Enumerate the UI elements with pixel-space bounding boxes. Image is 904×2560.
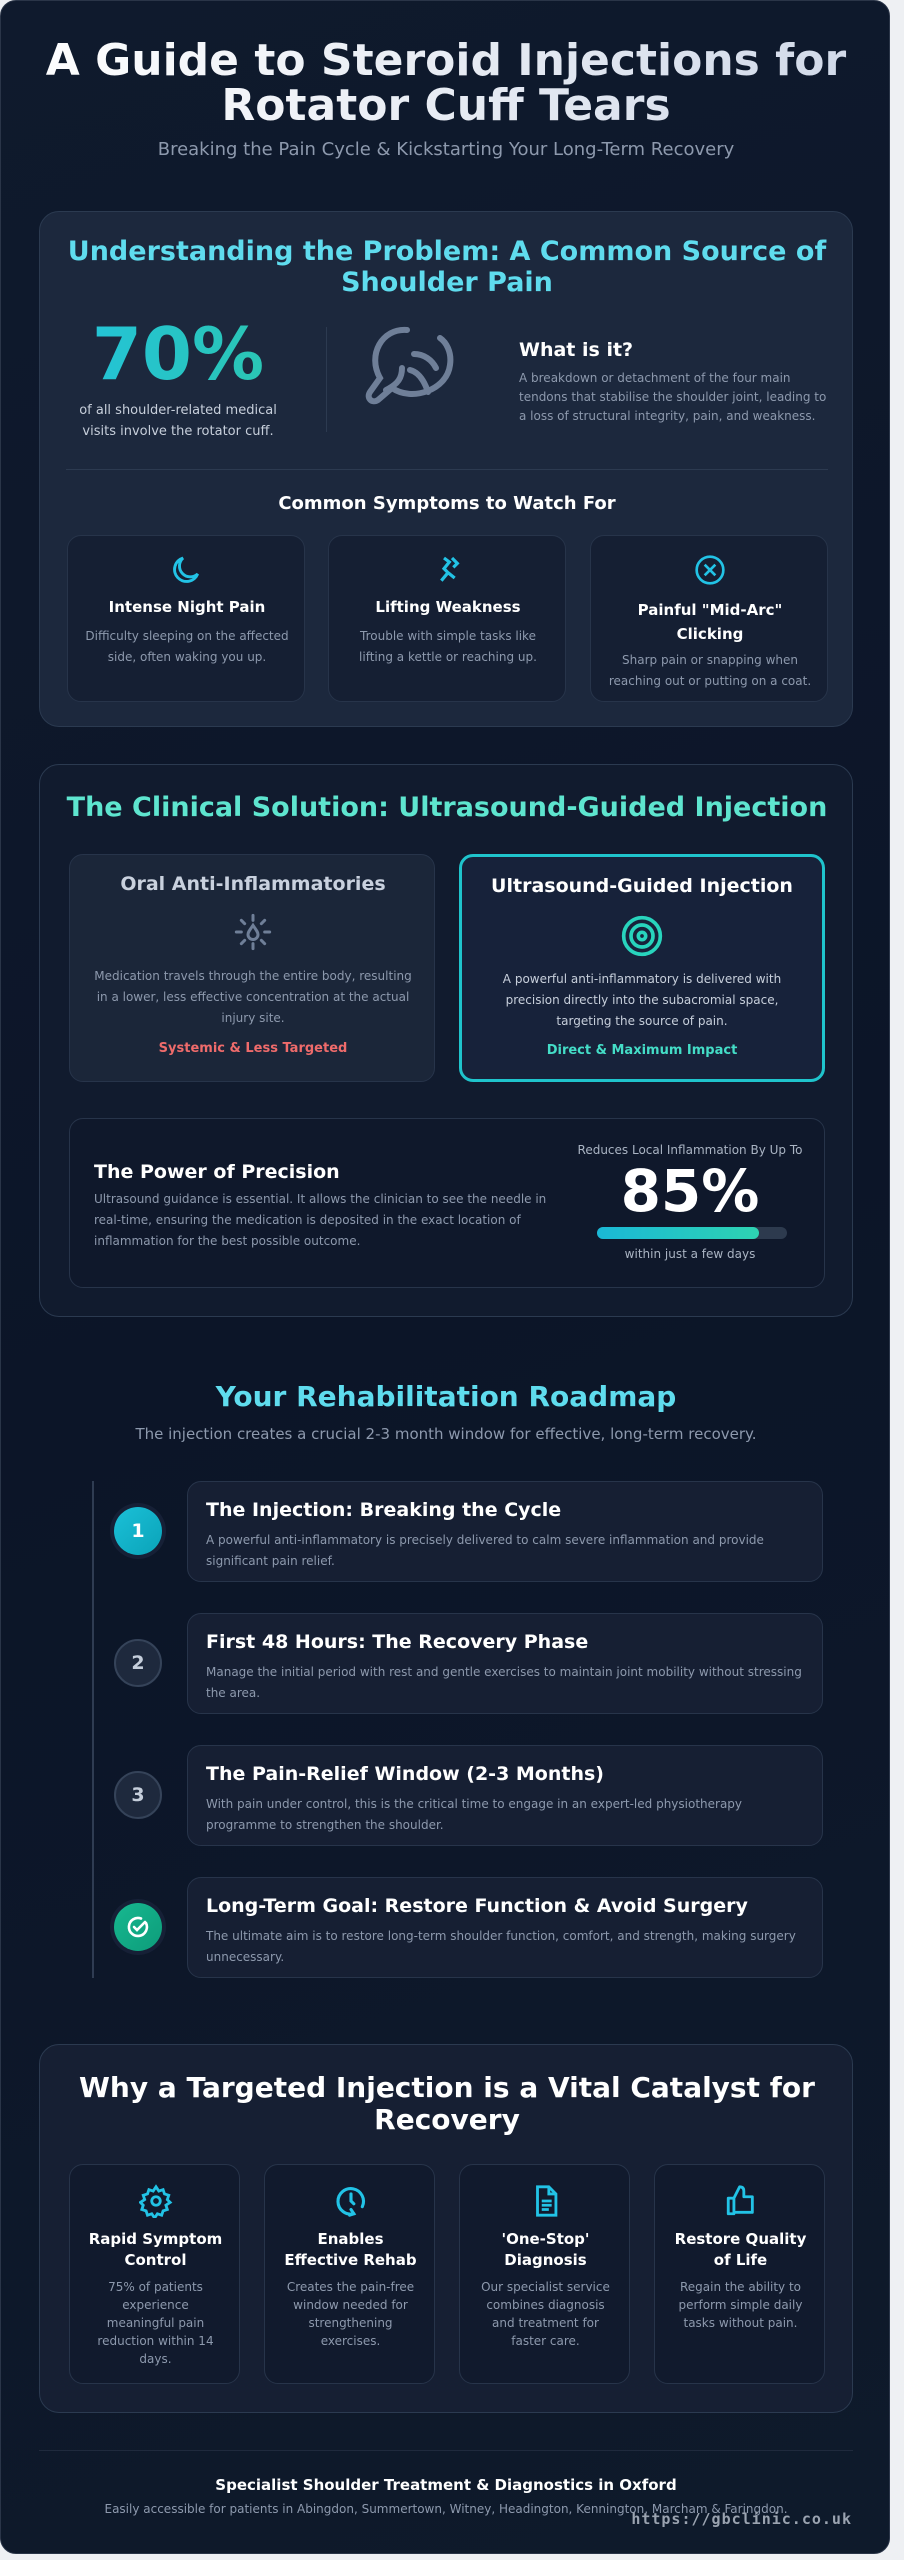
card: oral [69,854,435,1082]
card: ultrasound [459,854,825,1082]
precision box [69,1118,825,1288]
card: one-stop: Our specialist service combines diagnosis and treatment for faster care. [481,2280,610,2348]
heading: Why a Targeted Injection is a Vital Catalyst for [79,2071,815,2104]
card: lifting weakness: Lifting Weakness [375,598,521,616]
step 3: The Pain-Relief Window (2-3 Months) [206,1763,604,1785]
card: rapid: Rapid Symptom [89,2230,222,2248]
icon: weakness [440,556,460,582]
title: A Guide to Steroid Injections for [46,35,846,86]
step 1: A powerful anti-inflammatory is precisely delivered to calm severe inflammation and provide significant pain relief. [206,1533,764,1568]
step 4: Long-Term Goal: Restore Function & Avoid Surgery [206,1895,748,1917]
card: oral: Systemic & Less Targeted [159,1041,347,1056]
icon: clock [336,2187,366,2217]
panel heading [68,236,826,298]
circle 2 [114,1639,162,1687]
card: lifting weakness: Trouble with simple tasks like lifting a kettle or reaching up. [359,629,537,664]
card: quality: of Life [714,2251,767,2269]
step 2: First 48 Hours: The Recovery Phase [206,1631,588,1653]
card: rapid: Control [124,2251,186,2269]
what is it [519,339,826,423]
circle 1: 1 [131,1520,145,1542]
icon: gear [139,2184,172,2218]
card: rehab: Effective Rehab [284,2251,417,2269]
stat 70%: 70% [92,312,264,396]
step 2: Manage the initial period with rest and gentle exercises to maintain joint mobility without stressing the area. [206,1665,802,1700]
icon: document [536,2185,558,2217]
card: oral: Medication travels through the entire body, resulting in a lower, less effective concentration at the actual injury site. [94,969,412,1025]
card: one-stop: Diagnosis [504,2251,587,2269]
card: clicking: Clicking [677,625,743,643]
step 1: The Injection: Breaking the Cycle [206,1499,561,1521]
card: rehab: Creates the pain-free window needed for strengthening exercises. [287,2280,414,2348]
card: night pain [67,535,305,702]
card: ultrasound: Ultrasound-Guided Injection [491,875,793,897]
step 4 [110,1877,823,1978]
progress bar [597,1227,787,1239]
step 3 [114,1745,823,1846]
circle 2: 2 [131,1652,145,1674]
icon: moon [173,556,199,583]
step 1 [110,1481,823,1582]
heading [79,2071,815,2136]
stat 85% [578,1143,802,1261]
card: lifting weakness [328,535,566,702]
card: rapid [69,2164,240,2384]
circle 3 [114,1771,162,1819]
title: Rotator Cuff Tears [221,80,671,131]
stat 70%: visits involve the rotator cuff. [82,424,274,439]
panel heading: Understanding the Problem: A Common Source of [68,236,826,267]
card: night pain: Difficulty sleeping on the affected side, often waking you up. [85,629,289,664]
precision box: The Power of Precision [94,1161,340,1183]
subtitle: Breaking the Pain Cycle & Kickstarting Your Long-Term Recovery [158,139,734,160]
circle 1 [114,1507,162,1555]
what is it: What is it? [519,339,633,361]
title [46,35,846,131]
panel: why targeted injection [39,2044,853,2413]
stat 85%: within just a few days [625,1247,755,1261]
card: clicking: Painful "Mid-Arc" [638,601,782,619]
what is it: A breakdown or detachment of the four main tendons that stabilise the shoulder joint, leading to a loss of structural integrity, pain, and weakness. [519,371,826,423]
card: clicking: Sharp pain or snapping when reaching out or putting on a coat. [609,653,811,688]
icon: thumbs up [726,2185,754,2216]
card: ultrasound: A powerful anti-inflammatory is delivered with precision directly into the subacromial space, targeting the source of pain. [503,972,781,1028]
card: quality: Restore Quality [675,2230,806,2248]
icon: target [622,916,662,956]
card: ultrasound: Direct & Maximum Impact [547,1043,737,1058]
card: clicking [590,535,828,702]
stat 85%: 85% [621,1157,759,1225]
card: quality: Regain the ability to perform simple daily tasks without pain. [679,2280,802,2330]
roadmap subtitle: The injection creates a crucial 2-3 month window for effective, long-term recovery. [135,1425,757,1443]
panel: clinical solution [39,764,853,1317]
precision box: Ultrasound guidance is essential. It allows the clinician to see the needle in real-time, ensuring the medication is deposited in the exact location of inflammation for the best possible outcome. [94,1192,546,1248]
icon: shoulder [366,326,454,404]
roadmap heading: Your Rehabilitation Roadmap [216,1380,676,1413]
url watermark: https://gbclinic.co.uk [631,2510,852,2528]
panel heading: Shoulder Pain [341,267,553,298]
symptoms heading: Common Symptoms to Watch For [278,493,616,514]
heading: The Clinical Solution: Ultrasound-Guided Injection [67,792,827,823]
card: oral: Oral Anti-Inflammatories [120,873,386,895]
card: night pain: Intense Night Pain [109,598,265,616]
stat 70% [79,312,277,439]
circle 3: 3 [131,1784,145,1806]
card: one-stop: 'One-Stop' [501,2230,590,2248]
card: rapid: 75% of patients experience meaningful pain reduction within 14 days. [97,2280,214,2366]
card: quality [654,2164,825,2384]
stat 70%: of all shoulder-related medical [79,403,277,418]
icon: dispersal [234,914,272,950]
step 2 [114,1613,823,1714]
card: rehab: Enables [317,2230,384,2248]
footer title: Specialist Shoulder Treatment & Diagnostics in Oxford [215,2476,677,2494]
heading: Recovery [374,2103,520,2136]
panel: understanding the problem [39,211,853,727]
icon: x circle [695,555,725,585]
stat 85%: Reduces Local Inflammation By Up To [578,1143,802,1157]
card: rehab [264,2164,435,2384]
card: one-stop [459,2164,630,2384]
step 4: The ultimate aim is to restore long-term shoulder function, comfort, and strength, making surgery unnecessary. [206,1929,796,1964]
step 3: With pain under control, this is the critical time to engage in an expert-led physiotherapy programme to strengthen the shoulder. [206,1797,742,1832]
icon: check circle [114,1903,162,1951]
footer text: Easily accessible for patients in Abingdon, Summertown, Witney, Headington, Kennington, Marcham & Faringdon. [104,2502,788,2516]
